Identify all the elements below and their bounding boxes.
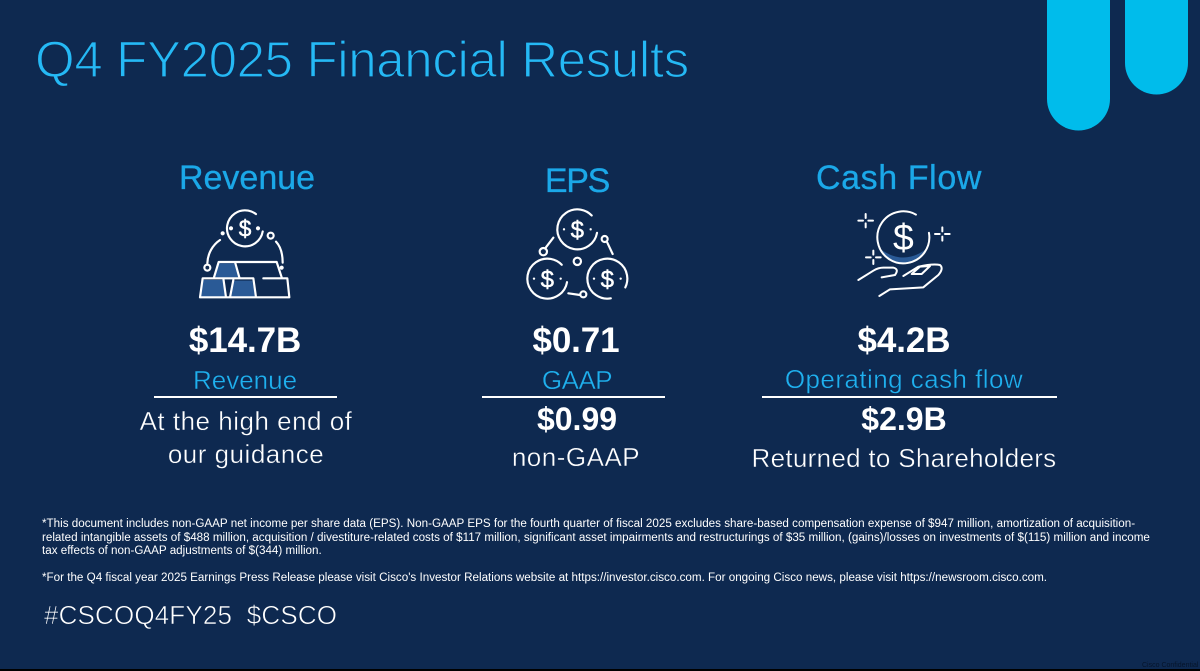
text: guidance note: our guidance: [168, 439, 324, 469]
text: guidance note: [140, 406, 352, 469]
heading: eps: EPS: [545, 162, 609, 200]
decorative brand shapes: [1047, 0, 1188, 130]
icon: three coins: $: [601, 266, 614, 293]
value: non-gaap eps: $0.99: [537, 401, 617, 437]
value: operating cash flow: $4.2B: [858, 321, 950, 360]
label: operating cash flow: Operating cash flow: [785, 364, 1023, 394]
text: non-gaap footnote: tax effects of non-GAAP adjustments of $(344) million.: [42, 544, 322, 557]
icon: three coins: [526, 208, 628, 300]
icon: hand holding coin: $: [893, 216, 914, 258]
panel: revenue: [140, 159, 352, 469]
text: guidance note: At the high end of: [140, 406, 352, 436]
text: press release footnote: *For the Q4 fiscal year 2025 Earnings Press Release please visit Cisco's Investor Relations website at https://investor.cisco.com. For ongoing Cisco news, please visit https://newsroom.cisco.com.: [42, 571, 1047, 584]
panel: cash flow: [752, 159, 1057, 473]
text: non-gaap footnote: *This document includes non-GAAP net income per share data (EPS). Non-GAAP EPS for the fourth quarter of fiscal 2025 excludes share-based compensation expense of $947 million, amortization of acquisition-: [42, 517, 1135, 530]
label: gaap: GAAP: [542, 365, 612, 395]
icon: gold bars and coin: [198, 209, 290, 298]
text: non-gaap footnote: related intangible assets of $488 million, acquisition / divestiture-related costs of $117 million, significant asset impairments and restructurings of $35 million, (gains)/losses on investments of $(115) million and income: [42, 530, 1150, 544]
value: revenue amount: $14.7B: [189, 321, 301, 360]
value: returned to shareholders: $2.9B: [861, 401, 947, 437]
heading: revenue: Revenue: [179, 159, 315, 197]
icon: hand holding coin: [857, 210, 951, 297]
label: returned to shareholders: Returned to Shareholders: [752, 443, 1056, 473]
divider: [762, 396, 1057, 398]
icon: three coins: $: [571, 217, 584, 244]
value: gaap eps: $0.71: [532, 321, 620, 360]
panel: eps: [482, 162, 665, 472]
text: non-gaap footnote: [42, 517, 1150, 557]
title: Q4 FY2025 Financial Results: [35, 31, 689, 88]
divider: [482, 396, 665, 398]
confidentiality note: Cisco Confidential: [1142, 662, 1198, 669]
icon: gold bars and coin: $: [239, 216, 252, 242]
label: non-gaap: non-GAAP: [512, 442, 640, 472]
icon: three coins: $: [541, 266, 554, 293]
bottom edge: [0, 669, 1200, 671]
label: revenue: Revenue: [193, 365, 297, 395]
hashtags: #CSCOQ4FY25 $CSCO: [44, 600, 337, 630]
heading: cash flow: Cash Flow: [816, 159, 982, 197]
divider: [154, 396, 337, 398]
